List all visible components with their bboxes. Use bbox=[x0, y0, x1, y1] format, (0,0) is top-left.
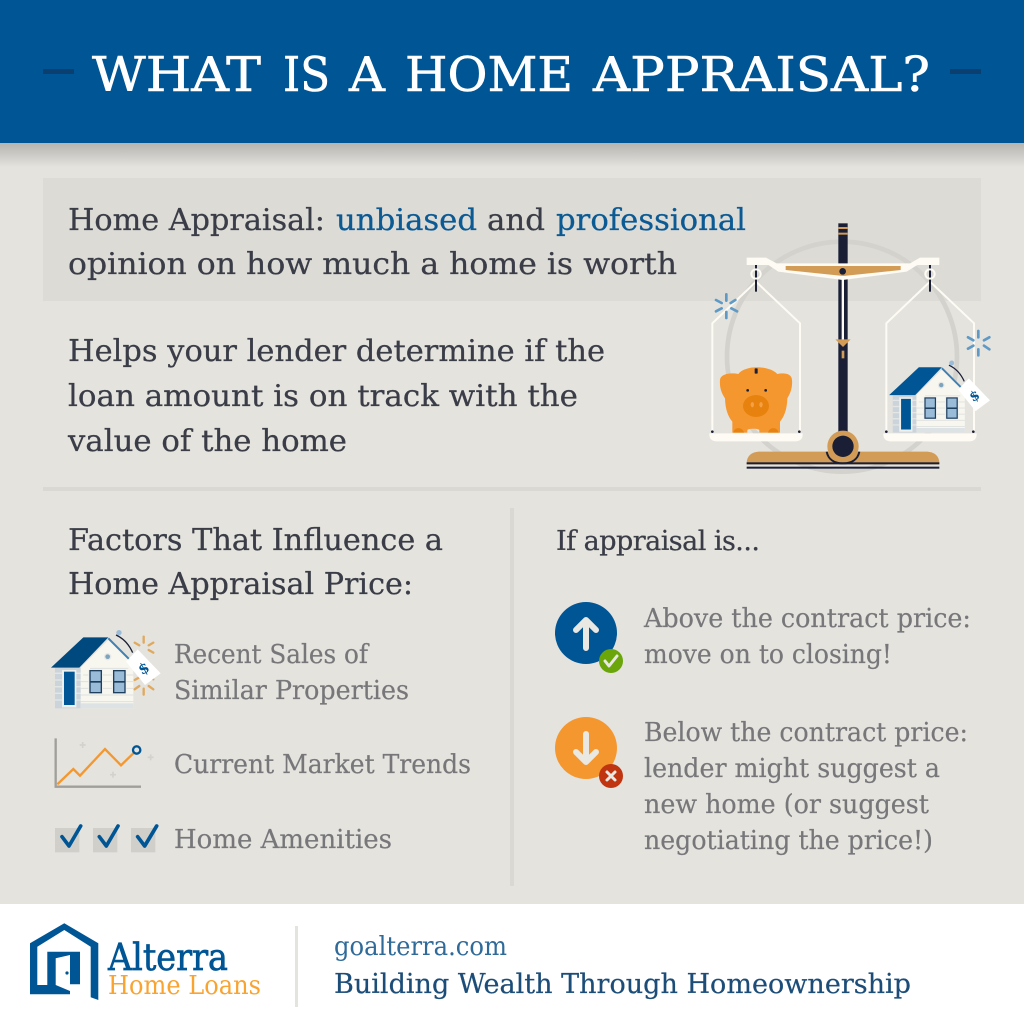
title: IS bbox=[283, 47, 330, 103]
icon: three checkmarks bbox=[55, 826, 157, 852]
icon: line chart bbox=[56, 738, 154, 787]
factor: recent sales: Recent Sales of bbox=[174, 639, 370, 670]
illustration: balance scale bbox=[709, 223, 990, 472]
lender explanation text: Helps your lender determine if the bbox=[68, 334, 605, 368]
icon: down arrow with x bbox=[555, 717, 623, 788]
outcome: below contract price: new home (or suggest bbox=[644, 789, 929, 820]
definition text bbox=[68, 203, 746, 281]
outcome: above contract price: Above the contract price: bbox=[643, 603, 971, 634]
title bbox=[92, 47, 930, 103]
footer bbox=[0, 904, 1024, 1024]
factor: amenities: Home Amenities bbox=[174, 824, 392, 855]
outcome: below contract price bbox=[644, 717, 968, 856]
title: HOME bbox=[405, 47, 573, 103]
icon: up arrow with check bbox=[555, 602, 623, 673]
icon: house with price tag bbox=[51, 630, 161, 708]
website: goalterra.com bbox=[334, 932, 507, 962]
outcome: above contract price: move on to closing! bbox=[644, 639, 892, 670]
definition text: and bbox=[487, 203, 545, 237]
icon: house and door bbox=[30, 923, 98, 1000]
brand subtitle: Home Loans bbox=[108, 971, 261, 1001]
outcome: below contract price: negotiating the price!) bbox=[644, 825, 933, 856]
right pan bbox=[883, 265, 977, 441]
factor: market trends: Current Market Trends bbox=[174, 749, 471, 780]
scale pole bbox=[835, 223, 851, 432]
definition text: opinion on how much a home is worth bbox=[68, 247, 677, 281]
lender explanation text: loan amount is on track with the bbox=[68, 379, 578, 413]
scale beam bbox=[747, 258, 939, 280]
outcome: above contract price bbox=[643, 603, 971, 670]
definition band bbox=[43, 178, 981, 301]
outcome: below contract price: lender might suggest a bbox=[644, 753, 940, 784]
title: APPRAISAL? bbox=[592, 47, 930, 103]
lender explanation text bbox=[67, 334, 605, 458]
panel: factors bbox=[51, 523, 471, 855]
factor: recent sales bbox=[174, 639, 409, 706]
icon: house on scale: $ bbox=[967, 387, 983, 406]
factors heading bbox=[68, 523, 443, 601]
brand name: Alterra bbox=[107, 936, 228, 979]
left pan bbox=[709, 265, 803, 441]
tagline: Building Wealth Through Homeownership bbox=[334, 969, 911, 1000]
definition text: unbiased bbox=[336, 203, 477, 237]
sparkle: blue left bbox=[716, 294, 737, 318]
header banner bbox=[0, 0, 1024, 143]
horizontal divider bbox=[43, 487, 981, 491]
title: A bbox=[348, 47, 386, 103]
icon: piggy bank bbox=[720, 367, 792, 433]
definition text: professional bbox=[556, 203, 746, 237]
logo: Alterra Home Loans bbox=[30, 923, 261, 1001]
factors heading: Factors That Influence a bbox=[68, 523, 443, 557]
icon: house on scale bbox=[889, 361, 990, 433]
outcome: below contract price: Below the contract price: bbox=[644, 717, 968, 748]
lender explanation text: value of the home bbox=[67, 424, 347, 458]
sparkle: blue right bbox=[968, 331, 989, 355]
panel: appraisal outcomes bbox=[555, 526, 971, 856]
scale base bbox=[747, 431, 939, 469]
factor: recent sales: Similar Properties bbox=[174, 675, 409, 706]
icon: house with price tag: $ bbox=[135, 659, 153, 679]
title: WHAT bbox=[92, 47, 261, 103]
definition text: Home Appraisal: bbox=[68, 203, 325, 237]
factors heading: Home Appraisal Price: bbox=[68, 567, 413, 601]
vertical divider bbox=[510, 508, 514, 886]
outcomes heading: If appraisal is... bbox=[556, 526, 760, 557]
